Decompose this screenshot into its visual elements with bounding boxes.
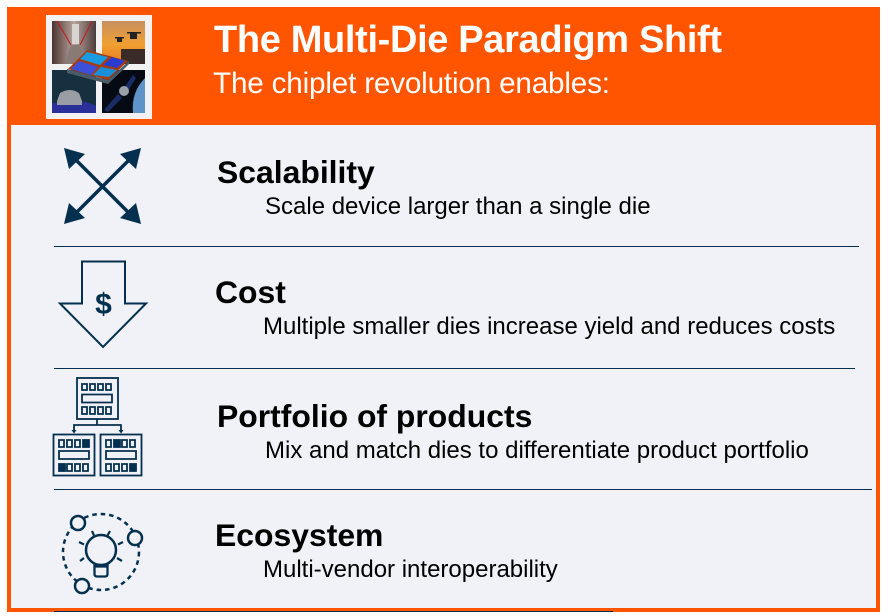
icon: cost down arrow (60, 262, 146, 347)
heading: scalability: Scalability (217, 154, 375, 190)
text: ecosystem description: Multi-vendor interoperability (263, 556, 558, 583)
icon: scalability arrows (64, 148, 141, 224)
text: cost description: Multiple smaller dies increase yield and reduces costs (263, 313, 835, 340)
text: scalability description: Scale device larger than a single die (265, 193, 651, 220)
subtitle: The chiplet revolution enables: (213, 67, 610, 100)
image: application collage (46, 15, 152, 119)
icon: ecosystem light bulb (63, 514, 142, 593)
panel: content background (11, 125, 876, 608)
icon: cost down arrow: $ (95, 288, 112, 321)
heading: ecosystem: Ecosystem (215, 517, 383, 553)
heading: cost: Cost (215, 274, 286, 310)
icon: portfolio dies (54, 378, 142, 476)
text: portfolio description: Mix and match dies to differentiate product portfolio (265, 437, 809, 464)
title: The Multi-Die Paradigm Shift (214, 19, 722, 61)
heading: portfolio of products: Portfolio of products (217, 398, 532, 434)
